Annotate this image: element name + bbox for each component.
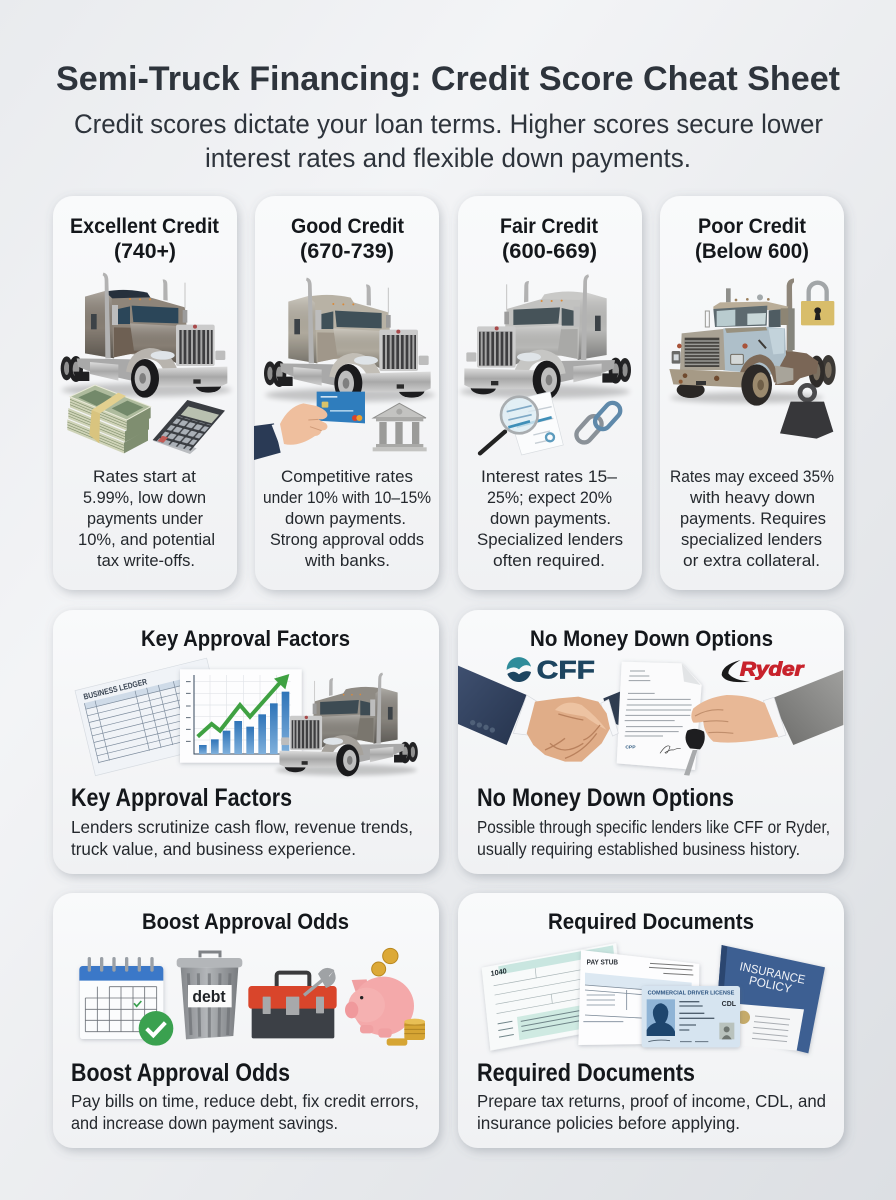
illustration: insurance policy book: INSURANCE (738, 959, 806, 987)
body text: 5.99%, low down (83, 488, 206, 507)
panel: key approval factors (53, 610, 439, 874)
logo: Ryder (722, 659, 805, 682)
body text (477, 817, 830, 859)
icon: debt trash can: debt (192, 987, 226, 1006)
body text: truck value, and business experience. (71, 839, 356, 859)
panel: boost approval odds (53, 893, 439, 1148)
icon: red toolbox with wrench (248, 970, 337, 1038)
illustration: handshake (458, 666, 620, 762)
body text: usually requiring established business history. (477, 839, 800, 859)
icon: magnifier over credit report (480, 392, 563, 455)
body text: and increase down payment savings. (71, 1113, 338, 1133)
body text: with heavy down (689, 488, 815, 507)
panel: poor credit (660, 196, 844, 590)
illustration: tax form 1040 (482, 943, 625, 1051)
body text: 25%; expect 20% (487, 488, 612, 507)
icon: piggy bank with coins (345, 948, 425, 1046)
heading: good credit (291, 214, 404, 263)
illustration: gray truck (460, 274, 631, 399)
chart: growth bars (180, 669, 302, 763)
heading: boost approval odds: Boost Approval Odds (142, 909, 349, 934)
heading: key approval factors: Key Approval Factors (141, 626, 350, 651)
illustration: commercial driver license (642, 986, 740, 1047)
illustration: insurance policy book: POLICY (748, 973, 793, 996)
body text: Strong approval odds (270, 530, 424, 549)
illustration: rusty truck (669, 278, 836, 406)
heading: good credit: Good Credit (291, 214, 404, 238)
body text: down payments. (285, 509, 406, 528)
illustration: truck (276, 673, 418, 776)
panel: required documents (458, 893, 844, 1148)
subheading: Key Approval Factors (71, 784, 292, 812)
heading: poor credit (695, 214, 809, 263)
subheading: Required Documents (477, 1059, 695, 1087)
panel: no money down options (458, 610, 844, 874)
heading: excellent credit (70, 214, 219, 263)
heading: excellent credit: (740+) (114, 239, 176, 263)
subtitle: Credit scores dictate your loan terms. Higher scores secure lower (74, 109, 823, 139)
body text (670, 467, 834, 570)
body text: payments under (87, 509, 203, 528)
heading: required documents: Required Documents (548, 909, 754, 934)
body text: down payments. (490, 509, 611, 528)
body text: payments. Requires (680, 509, 826, 528)
heading: no money down: No Money Down Options (530, 626, 773, 651)
subtitle (74, 109, 823, 173)
icon: bank building (373, 403, 427, 451)
illustration: hand passing keys (684, 670, 843, 776)
body text (477, 467, 623, 570)
heading: fair credit: Fair Credit (500, 214, 598, 238)
illustration: pay stub (578, 950, 699, 1045)
body text (477, 1091, 826, 1133)
icon: calendar (79, 959, 173, 1046)
illustration: insurance policy book (715, 945, 825, 1053)
body text: tax write-offs. (97, 551, 195, 570)
illustration: silver truck (264, 278, 435, 403)
subheading: Boost Approval Odds (71, 1059, 290, 1087)
icon: hand holding credit card (254, 392, 365, 460)
icon: debt trash can (177, 952, 242, 1039)
heading: poor credit: Poor Credit (698, 214, 806, 238)
icon: calculator (153, 400, 225, 454)
icon: chain link (573, 400, 623, 446)
body text (71, 1091, 419, 1133)
body text: with banks. (304, 551, 390, 570)
illustration: ledger (75, 658, 227, 776)
body text: specialized lenders (681, 530, 822, 549)
illustration: tax form 1040: 1040 (490, 966, 507, 978)
panel: fair credit (458, 196, 642, 590)
panel: excellent credit (53, 196, 237, 590)
heading: fair credit: (600-669) (502, 239, 597, 263)
subheading: No Money Down Options (477, 784, 734, 812)
body text (71, 817, 413, 859)
body text: Lenders scrutinize cash flow, revenue trends, (71, 817, 413, 837)
body text: Possible through specific lenders like CFF or Ryder, (477, 817, 830, 837)
body text: Rates start at (93, 467, 196, 486)
icon: cash stacks (67, 385, 151, 453)
title: Semi-Truck Financing: Credit Score Cheat Sheet (56, 60, 840, 98)
icon: padlock (801, 283, 834, 325)
icon: iron weight (780, 385, 833, 439)
body text (263, 467, 431, 570)
illustration: contract: CPP (625, 745, 636, 751)
illustration: contract (617, 662, 702, 770)
illustration: ledger: BUSINESS LEDGER (83, 677, 148, 702)
body text: often required. (493, 551, 605, 570)
body text: Pay bills on time, reduce debt, fix credit errors, (71, 1091, 419, 1111)
logo: CFF (507, 657, 595, 685)
illustration: pay stub: PAY STUB (587, 959, 618, 966)
body text (78, 467, 215, 570)
body text: or extra collateral. (683, 551, 820, 570)
body text: Interest rates 15– (481, 467, 618, 486)
body text: Prepare tax returns, proof of income, CDL, and (477, 1091, 826, 1111)
body text: under 10% with 10–15% (263, 488, 431, 507)
body text: Specialized lenders (477, 530, 623, 549)
body text: 10%, and potential (78, 530, 215, 549)
logo: Ryder: Ryder (740, 659, 805, 680)
body text: Competitive rates (281, 467, 413, 486)
body text: insurance policies before applying. (477, 1113, 740, 1133)
illustration: chrome truck (61, 273, 232, 398)
body text: Rates may exceed 35% (670, 467, 834, 486)
heading: fair credit (500, 214, 598, 263)
logo: CFF: CFF (537, 657, 595, 685)
illustration: commercial driver license: CDL (722, 1001, 737, 1008)
heading: excellent credit: Excellent Credit (70, 214, 219, 238)
panel: good credit (254, 196, 439, 590)
heading: good credit: (670-739) (300, 239, 394, 263)
heading: poor credit: (Below 600) (695, 239, 809, 263)
subtitle: interest rates and flexible down payments. (205, 143, 691, 173)
illustration: commercial driver license: COMMERCIAL DRIVER LICENSE (648, 990, 735, 996)
